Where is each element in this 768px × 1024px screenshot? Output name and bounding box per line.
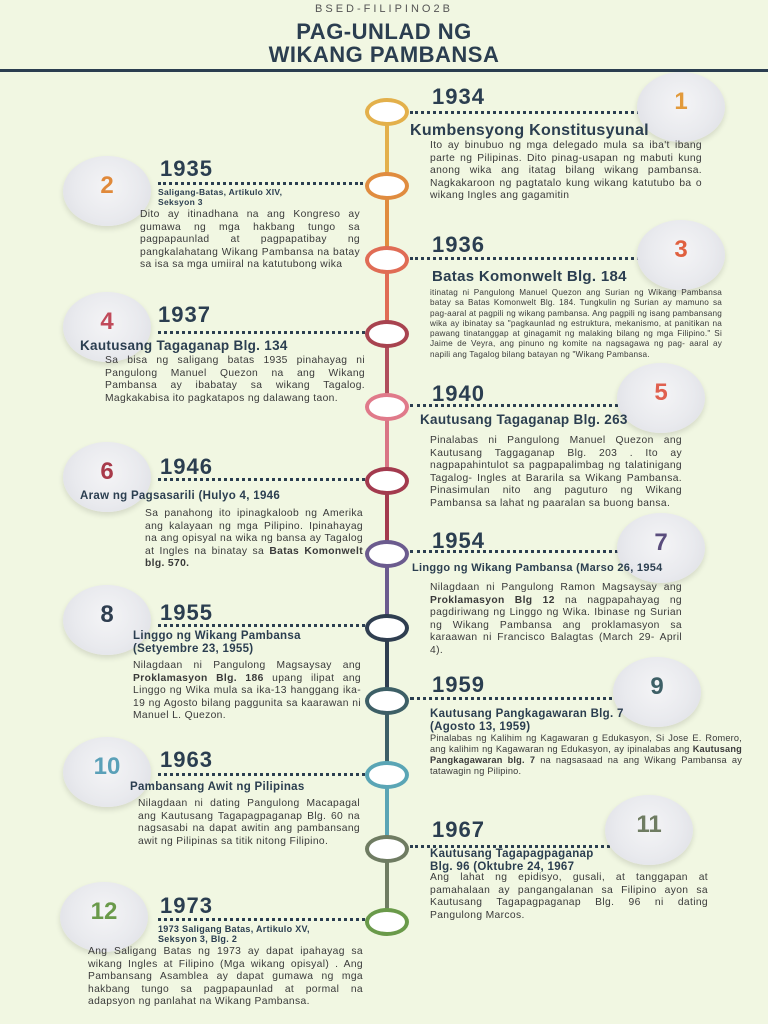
title: PAG-UNLAD NG [296, 19, 472, 44]
badge 1 [637, 72, 725, 142]
event 1959: (Agosto 13, 1959) [430, 721, 530, 733]
badge 10 [63, 737, 151, 807]
event 1955: (Setyembre 23, 1955) [133, 643, 253, 655]
badge 8: 8 [100, 601, 114, 628]
timeline nodes [365, 98, 637, 936]
event 1954: 1954 [432, 528, 485, 553]
event 1946: 1946 [160, 454, 213, 479]
event 1937 [62, 292, 365, 404]
title [268, 19, 499, 67]
event 1963 [62, 737, 365, 847]
badge 11: 11 [636, 811, 662, 838]
badge 2 [63, 156, 151, 226]
event 1959 [410, 657, 742, 776]
event 1946 [62, 442, 365, 569]
event 1967: Ang lahat ng epidisyo, gusali, at tanggapan at pamahalaan ay pangangalanan sa Filipino ayon sa Kautusang Tagapagpaganap Blg. 96 ni dating Pangulong Marcos. [430, 872, 708, 921]
event 1954: Linggo ng Wikang Pambansa (Marso 26, 1954 [412, 562, 663, 574]
event 1935: 1935 [160, 156, 213, 181]
event 1967: Kautusang Tagapagpaganap [430, 848, 594, 860]
badge 5: 5 [654, 379, 668, 406]
badge 12: 12 [91, 898, 117, 925]
event 1959: 1959 [432, 672, 485, 697]
badge 7 [617, 513, 705, 583]
event 1973 [58, 882, 365, 1007]
badge 4: 4 [100, 308, 114, 335]
event 1954 [410, 513, 706, 656]
event 1955: 1955 [160, 600, 213, 625]
event 1963: 1963 [160, 747, 213, 772]
event 1959: Kautusang Pangkagawaran Blg. 7 [430, 708, 624, 720]
event 1935: Dito ay itinadhana na ang Kongreso ay gumawa ng mga hakbang tungo sa pagpapaunlad at pagpapatibay ng pangkalahatang Wikang Pambansa na batay sa isa sa mga umiiral na katutubong wika [140, 209, 360, 270]
event 1934 [410, 72, 726, 201]
event 1935 [62, 156, 363, 270]
event 1940 [410, 363, 706, 509]
badge 2: 2 [100, 172, 114, 199]
event 1936 [410, 220, 726, 359]
event 1946: Araw ng Pagsasarili (Hulyo 4, 1946 [80, 490, 280, 502]
event 1937: Sa bisa ng saligang batas 1935 pinahayag ni Pangulong Manuel Quezon na ang Wikang Pambansa ay ibabatay sa wikang Tagalog. Magkakabisa ito pagkatapos ng dalawang taon. [105, 355, 365, 404]
event 1936: itinatag ni Pangulong Manuel Quezon ang Surian ng Wikang Pambansa batay sa Batas Komonwelt Blg. 184. Tungkulin ng Surian ay mamuno sa pag-aaral at pagpili ng wikang pambansa. Ang pagpili ng isang pambansang wika ay ibinatay sa "pagkaunlad ng estruktura, mekanismo, at panitikan na pawang tinatanggap at ginagamit ng malaking bilang ng mga Filipino." Si Jaime de Veyra, ang pinuno ng komite na nagsagawa ng pag- aaral ay napili ang Tagalog bilang batayan ng "Wikang Pambansa. [430, 288, 722, 359]
event 1967: Blg. 96 (Oktubre 24, 1967 [430, 861, 574, 873]
event 1935: Seksyon 3 [158, 197, 203, 207]
badge 4 [63, 292, 151, 362]
badge 5 [617, 363, 705, 433]
title: WIKANG PAMBANSA [269, 42, 499, 67]
event 1937: 1937 [158, 302, 211, 327]
badge 12 [60, 882, 148, 952]
event 1955 [62, 585, 365, 721]
event 1934: Kumbensyong Konstitusyunal [410, 122, 649, 139]
event 1973: Ang Saligang Batas ng 1973 ay dapat ipahayag sa wikang Ingles at Filipino (Mga wikang opisyal) . Ang Pambansang Asamblea ay dapat gumawa ng mga hakbang tungo sa pagpapaunlad at pormal na adapsyon ng panlahat na Wikang Pambansa. [88, 946, 363, 1007]
badge 7: 7 [654, 529, 668, 556]
badge 3: 3 [674, 236, 688, 263]
event 1935: Saligang-Batas, Artikulo XIV, [158, 187, 282, 197]
event 1936: 1936 [432, 232, 485, 257]
event 1954: Nilagdaan ni Pangulong Ramon Magsaysay ang Proklamasyon Blg 12 na nagpapahayag ng pagdiriwang ng Linggo ng Wika. Ibinase ng Surian ng Wikang Pambansa ang proklamasyon sa karaawan ni Francisco Balagtas (March 29- April 4). [430, 582, 682, 656]
event 1936: Batas Komonwelt Blg. 184 [432, 268, 627, 285]
event 1934: 1934 [432, 84, 485, 109]
event 1946: Sa panahong ito ipinagkaloob ng Amerika ang kalayaan ng mga Pilipino. Ipinahayag na ang opisyal na wika ng bansa ay Tagalog at Ingles na binatay sa Batas Komonwelt blg. 570. [145, 508, 363, 569]
event 1934: Ito ay binubuo ng mga delegado mula sa iba't ibang parte ng Pilipinas. Dito pinag-usapan ng mabuti kung anong wika ang itatag bilang wikang pambansa. Nagkakaroon ng pagtatalo kung wikang katutubo ba o wikang Ingles ang gagamitin [430, 140, 702, 201]
event 1940: 1940 [432, 381, 485, 406]
event 1959: Pinalabas ng Kalihim ng Kagawaran g Edukasyon, Si Jose E. Romero, ang kalihim ng Kagawaran ng Edukasyon, ay ipinalabas ang Kautusang Pangkagawaran blg. 7 na nagsasaad na ang Wikang Pambansa ay tatawagin ng Pilipino. [430, 733, 742, 776]
badge 9 [613, 657, 701, 727]
event 1963: Nilagdaan ni dating Pangulong Macapagal ang Kautusang Tagapagpaganap Blg. 60 na nagsasabi na dapat awitin ang pambansang awit ng Pilipinas sa titik nitong Filipino. [138, 798, 360, 847]
badge 10: 10 [94, 753, 120, 780]
event 1973: 1973 [160, 893, 213, 918]
event 1973: Seksyon 3, Blg. 2 [158, 934, 237, 944]
event 1973: 1973 Saligang Batas, Artikulo XV, [158, 924, 310, 934]
event 1955: Nilagdaan ni Pangulong Magsaysay ang Proklamasyon Blg. 186 upang ilipat ang Linggo ng Wika mula sa ika-13 hanggang ika-19 ng Agosto bilang paggunita sa kaarawan ni Manuel L. Quezon. [133, 660, 361, 721]
event 1963: Pambansang Awit ng Pilipinas [130, 781, 305, 793]
event 1967: 1967 [432, 817, 485, 842]
badge 9: 9 [650, 673, 664, 700]
event 1937: Kautusang Tagaganap Blg. 134 [80, 338, 288, 353]
badge 3 [637, 220, 725, 290]
event 1967 [410, 795, 708, 921]
badge 1: 1 [674, 88, 688, 115]
badge 11 [605, 795, 693, 865]
badge 6 [63, 442, 151, 512]
subtitle: BSED-FILIPINO2B [315, 3, 453, 15]
event 1940: Kautusang Tagaganap Blg. 263 [420, 412, 628, 427]
event 1955: Linggo ng Wikang Pambansa [133, 630, 301, 642]
event 1940: Pinalabas ni Pangulong Manuel Quezon ang Kautusang Taggaganap Blg. 203 . Ito ay nagpapahintulot sa pagpapalimbag ng talatinigang Tagalog- Ingles at Bararila sa Wikang Pambansa. Pinasimulan nito ang paguturo ng Wikang Pambansa sa lahat ng paaralan sa buong bansa. [430, 435, 682, 509]
badge 8 [63, 585, 151, 655]
badge 6: 6 [100, 458, 114, 485]
